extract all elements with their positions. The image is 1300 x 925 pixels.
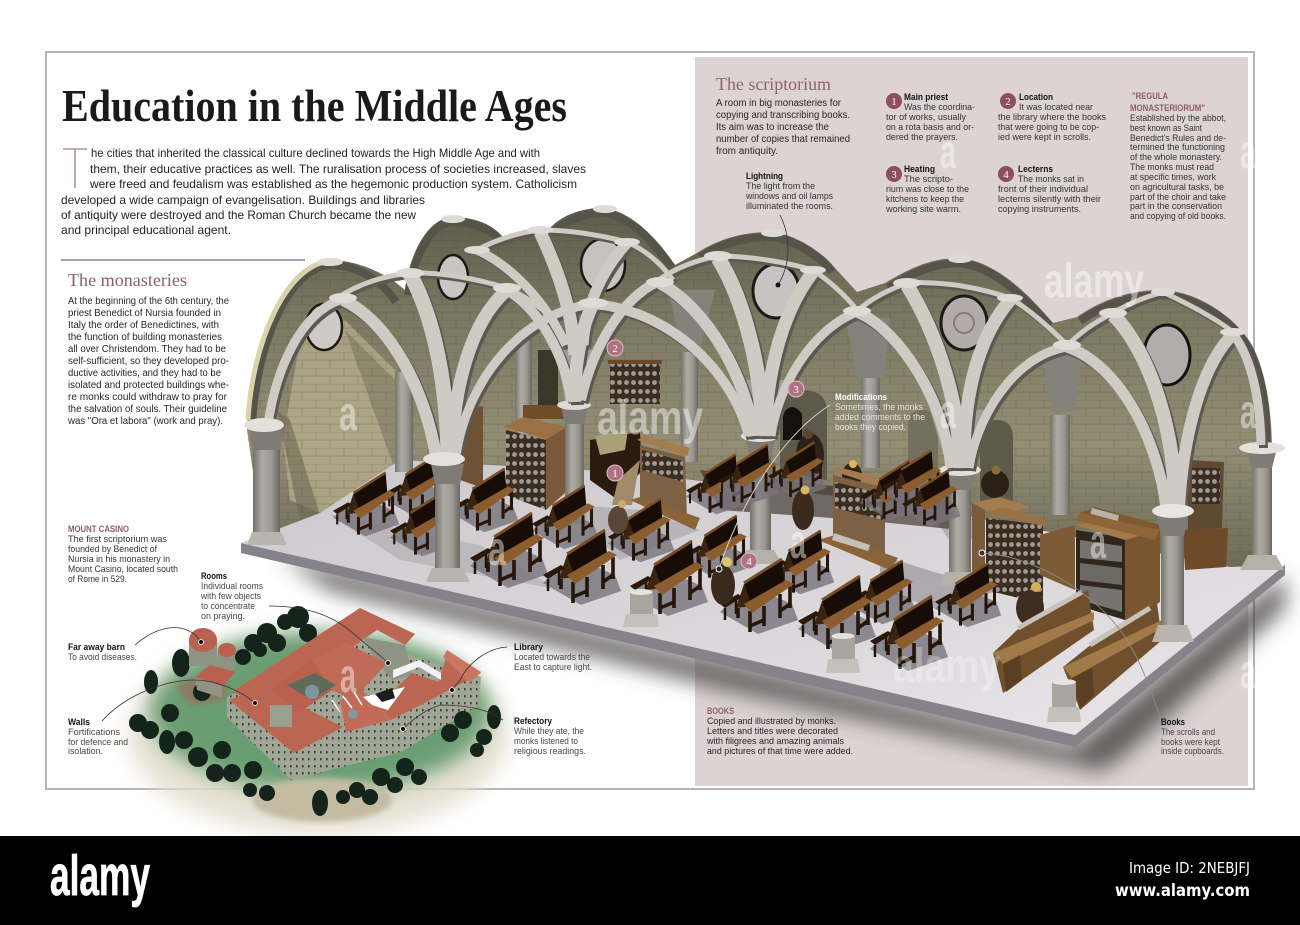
item 4: lecterns: Lecterns [1018, 164, 1053, 175]
text: regula monasteriorum: of the whole monastery. [1130, 152, 1222, 163]
label: walls: isolation. [68, 746, 103, 757]
watermarks: a [1240, 126, 1256, 179]
drop cap T [63, 149, 87, 188]
label: refectory: religious readings. [514, 746, 586, 757]
section rule [61, 259, 305, 261]
intro text: developed a wide campaign of evangelisation. Buildings and libraries [61, 193, 425, 207]
text: regula monasteriorum: best known as Saint [1130, 123, 1202, 134]
item 1: main priest: 1 [891, 96, 897, 108]
tall cupboards at rear [460, 405, 1228, 570]
label: far away barn [68, 642, 137, 663]
item 3: heating [885, 164, 969, 215]
monk at lectern [1016, 582, 1044, 626]
item 3: heating: rium was close to the [886, 184, 969, 195]
item 4: lecterns: The monks sat in [1018, 174, 1084, 185]
item 1: main priest: on a rota basis and or- [886, 122, 974, 133]
text: regula monasteriorum: Established by the abbot, [1130, 113, 1226, 124]
label: lightning [745, 171, 833, 212]
text: the scriptorium: number of copies that remained [716, 134, 850, 145]
text: mount casino [68, 524, 178, 585]
round windows [306, 239, 1190, 385]
stone walls and vault webbing [247, 208, 1272, 570]
text: regula monasteriorum [1130, 91, 1226, 222]
text: the monasteries: self-sufficient, so they developed pro- [68, 356, 229, 367]
text: books note: with filigrees and amazing animals [706, 736, 844, 747]
text: the monasteries: At the beginning of the 6th century, the [68, 296, 229, 307]
label: walls: Fortifications [68, 727, 120, 738]
label: lightning: windows and oil lamps [745, 191, 833, 202]
label: books: The scrolls and [1161, 727, 1215, 738]
label: refectory: Refectory [514, 716, 553, 727]
text: the monasteries: Italy the order of Benedictines, with [68, 320, 219, 331]
text: the monasteries: the salvation of souls. Their guideline [68, 404, 227, 415]
text: regula monasteriorum: MONASTERIORUM" [1130, 103, 1205, 114]
scriptorium illustration [241, 205, 1285, 772]
text: books note: Letters and titles were decorated [707, 726, 838, 737]
text: regula monasteriorum: on agricultural tasks, be [1130, 182, 1224, 193]
footer bar [0, 836, 1300, 925]
label: books [1161, 717, 1224, 757]
watermarks: a [488, 523, 506, 576]
number badges on illustration: 4 [746, 556, 752, 568]
rear columns [556, 350, 1285, 586]
watermarks: alamy [597, 392, 703, 445]
number badges on illustration: 3 [793, 384, 799, 396]
label: library: East to capture light. [514, 662, 592, 673]
text: the monasteries: was "Ora et labora" (work and pray). [67, 416, 223, 427]
number badges on illustration: 1 [612, 468, 618, 480]
label: modifications: books they copied. [835, 422, 906, 433]
item 1: main priest: Was the coordina- [904, 102, 975, 113]
label: rooms [200, 571, 263, 622]
intro text: them, their educative practices as well. The ruralisation process of societies increased, slaves [90, 162, 586, 176]
arrow: lightning [776, 215, 788, 288]
reading lectern 2 [1063, 603, 1162, 710]
text: the scriptorium: A room in big monasteries for [716, 98, 842, 109]
label: refectory: monks listened to [514, 736, 578, 747]
trees in front [129, 704, 501, 816]
item 3: heating: working site warm. [885, 204, 961, 215]
text: the scriptorium [716, 98, 850, 157]
text: regula monasteriorum: The monks must read [1130, 162, 1214, 173]
item 3: heating: 3 [891, 169, 897, 181]
footer image id: Image ID: 2NEBJFJ [1129, 859, 1250, 877]
callout lines [102, 606, 507, 729]
text: regula monasteriorum: termined the functioning [1130, 142, 1225, 153]
intro text: of antiquity were destroyed and the Roman Church became the new [61, 208, 416, 222]
watermarks: alamy [1044, 255, 1144, 308]
item 2: location: It was located near [1019, 102, 1093, 113]
item 1: main priest: tor of works, usually [886, 112, 966, 123]
cupboard with scrolls 2 [630, 436, 700, 530]
label: refectory [514, 716, 586, 757]
label: books: books were kept [1161, 737, 1220, 748]
floor slab [241, 460, 1285, 747]
rows of desks [333, 442, 1001, 671]
label: books: inside cupboards. [1161, 746, 1224, 757]
item 2: location: 2 [1005, 96, 1011, 108]
label: rooms: Rooms [201, 571, 227, 582]
watermarks: a [339, 388, 357, 441]
text: the monasteries: priest Benedict of Nursia founded in [68, 308, 221, 319]
text: regula monasteriorum: "REGULA [1132, 91, 1168, 102]
label: walls: Walls [68, 717, 90, 728]
text: mount casino: MOUNT CASINO [68, 524, 129, 535]
footer logo: alamy [50, 844, 150, 908]
label: far away barn: To avoid diseases. [68, 652, 137, 663]
text: the scriptorium: from antiquity. [716, 146, 778, 157]
item 3: heating: Heating [904, 164, 935, 175]
text: mount casino: founded by Benedict of [68, 544, 157, 555]
label: walls [68, 717, 128, 757]
item 3: heating: The scripto- [904, 174, 953, 185]
item 4: lecterns [998, 164, 1101, 215]
far away barn [189, 628, 236, 698]
label: library: Library [514, 642, 544, 653]
watermarks: a [340, 650, 356, 703]
text: mount casino: Mount Casino, located south [68, 564, 178, 575]
text: the monasteries: the function of building monasteries [68, 332, 222, 343]
item 4: lecterns: lecterns silently with their [998, 194, 1101, 205]
watermarks [339, 126, 1256, 703]
text: regula monasteriorum: at specific times, work [1130, 172, 1216, 183]
vault ribs [268, 230, 1264, 511]
frame [46, 52, 1254, 789]
label: rooms: on praying. [201, 611, 245, 622]
label: library [514, 642, 592, 673]
label: rooms: to concentrate [201, 601, 255, 612]
label: modifications: added comments to the [835, 412, 925, 423]
item 3: heating: kitchens to keep the [886, 194, 964, 205]
item 1: main priest [886, 92, 975, 143]
label: lightning: Lightning [746, 171, 783, 182]
front columns [244, 418, 1194, 642]
text: books note: Copied and illustrated by monks. [707, 716, 836, 727]
text: the scriptorium: copying and transcribing books. [716, 110, 850, 121]
label: rooms: Individual rooms [201, 581, 263, 592]
label: lightning: The light from the [746, 181, 815, 192]
item 1: main priest: dered the prayers. [886, 132, 958, 143]
label: far away barn: Far away barn [68, 642, 125, 653]
item 2: location: the library where the books [998, 112, 1106, 123]
footer url: www.alamy.com [1115, 881, 1250, 901]
monastery walls [227, 640, 481, 780]
text: mount casino: of Rome in 529. [68, 574, 127, 585]
label: refectory: While they ate, the [514, 726, 584, 737]
text: the monasteries: all over Christendom. They had to be [68, 344, 226, 355]
text: the scriptorium: Its aim was to increase the [716, 122, 829, 133]
watermarks: a [1240, 646, 1256, 699]
monastery roofs [229, 608, 481, 753]
ground [128, 632, 508, 835]
watermarks: a [1240, 386, 1256, 439]
watermarks: a [1090, 516, 1106, 569]
number badges on illustration [607, 340, 804, 569]
heading: the scriptorium: The scriptorium [716, 74, 831, 94]
monastery illustration: Mount Casino [102, 606, 508, 835]
item 4: lecterns: copying instruments. [998, 204, 1081, 215]
text: regula monasteriorum: part of the choir and take [1130, 192, 1226, 203]
watermarks: a [940, 386, 956, 439]
cupboard with scrolls 3 [818, 467, 898, 570]
main priest seat [590, 430, 642, 505]
intro text: were freed and feudalism was established as the hegemonic production system. Catholicism [89, 177, 577, 191]
text: regula monasteriorum: and copying of old books. [1130, 211, 1226, 222]
label: walls: for defence and [68, 737, 128, 748]
column stubs [623, 589, 1081, 722]
text: mount casino: Nursia in his monastery in [68, 554, 170, 565]
monks at desks [608, 486, 814, 605]
intro text [61, 146, 586, 237]
intro text: and principal educational agent. [61, 223, 231, 237]
slab shadow [280, 556, 1285, 772]
item 2: location: Location [1019, 92, 1053, 103]
watermarks: a [940, 126, 956, 179]
text: mount casino: The first scriptorium was [68, 534, 167, 545]
label: rooms: with few objects [200, 591, 261, 602]
reading lectern 1 [993, 590, 1094, 693]
tall grid cupboard [972, 497, 1047, 604]
heading: the monasteries: The monasteries [68, 270, 187, 290]
text: regula monasteriorum: part in the conservation [1130, 201, 1222, 212]
courtyards [287, 660, 441, 719]
callout dots [198, 640, 454, 732]
watermarks: alamy [893, 640, 1000, 693]
pilasters and niches [395, 290, 1085, 515]
rib keystones [317, 205, 1246, 350]
arrow: modifications [716, 405, 830, 572]
text: the monasteries: re monks could withdraw to pray for [68, 392, 228, 403]
text: books note [706, 706, 853, 757]
label: modifications: Sometimes, the monks [835, 402, 923, 413]
text: books note: BOOKS [707, 706, 734, 717]
label: library: Located towards the [514, 652, 590, 663]
text: the monasteries [67, 296, 229, 427]
panel: scriptorium background [695, 57, 1248, 786]
item 4: lecterns: front of their individual [998, 184, 1088, 195]
label: modifications [835, 392, 925, 433]
watermarks: a [790, 516, 806, 569]
intro text: he cities that inherited the classical culture declined towards the High Middle Age and with [91, 146, 540, 160]
item 1: main priest: Main priest [904, 92, 949, 103]
text: books note: and pictures of that time were added. [707, 746, 853, 757]
label: modifications: Modifications [835, 392, 887, 403]
text: the monasteries: isolated and protected buildings whe- [68, 380, 229, 391]
wall shelf with scrolls [608, 360, 662, 404]
trees behind [144, 606, 317, 701]
label: lightning: illuminated the rooms. [746, 201, 833, 212]
monks at rear [796, 429, 1009, 498]
item 2: location: that were going to be cop- [998, 122, 1099, 133]
cupboard with scrolls 1 [503, 417, 567, 510]
label: books: Books [1161, 717, 1185, 728]
title: Education in the Middle Ages [62, 81, 567, 131]
text: the monasteries: ductive activities, and they had to be [68, 368, 221, 379]
item 2: location [998, 92, 1106, 143]
text: regula monasteriorum: Benedict's Rules and de- [1130, 133, 1226, 144]
item 2: location: ied were kept in scrolls. [998, 132, 1091, 143]
number badges on illustration: 2 [612, 343, 618, 355]
bookshelf [1040, 513, 1160, 625]
arrow: books [979, 550, 1160, 717]
item 4: lecterns: 4 [1003, 169, 1009, 181]
